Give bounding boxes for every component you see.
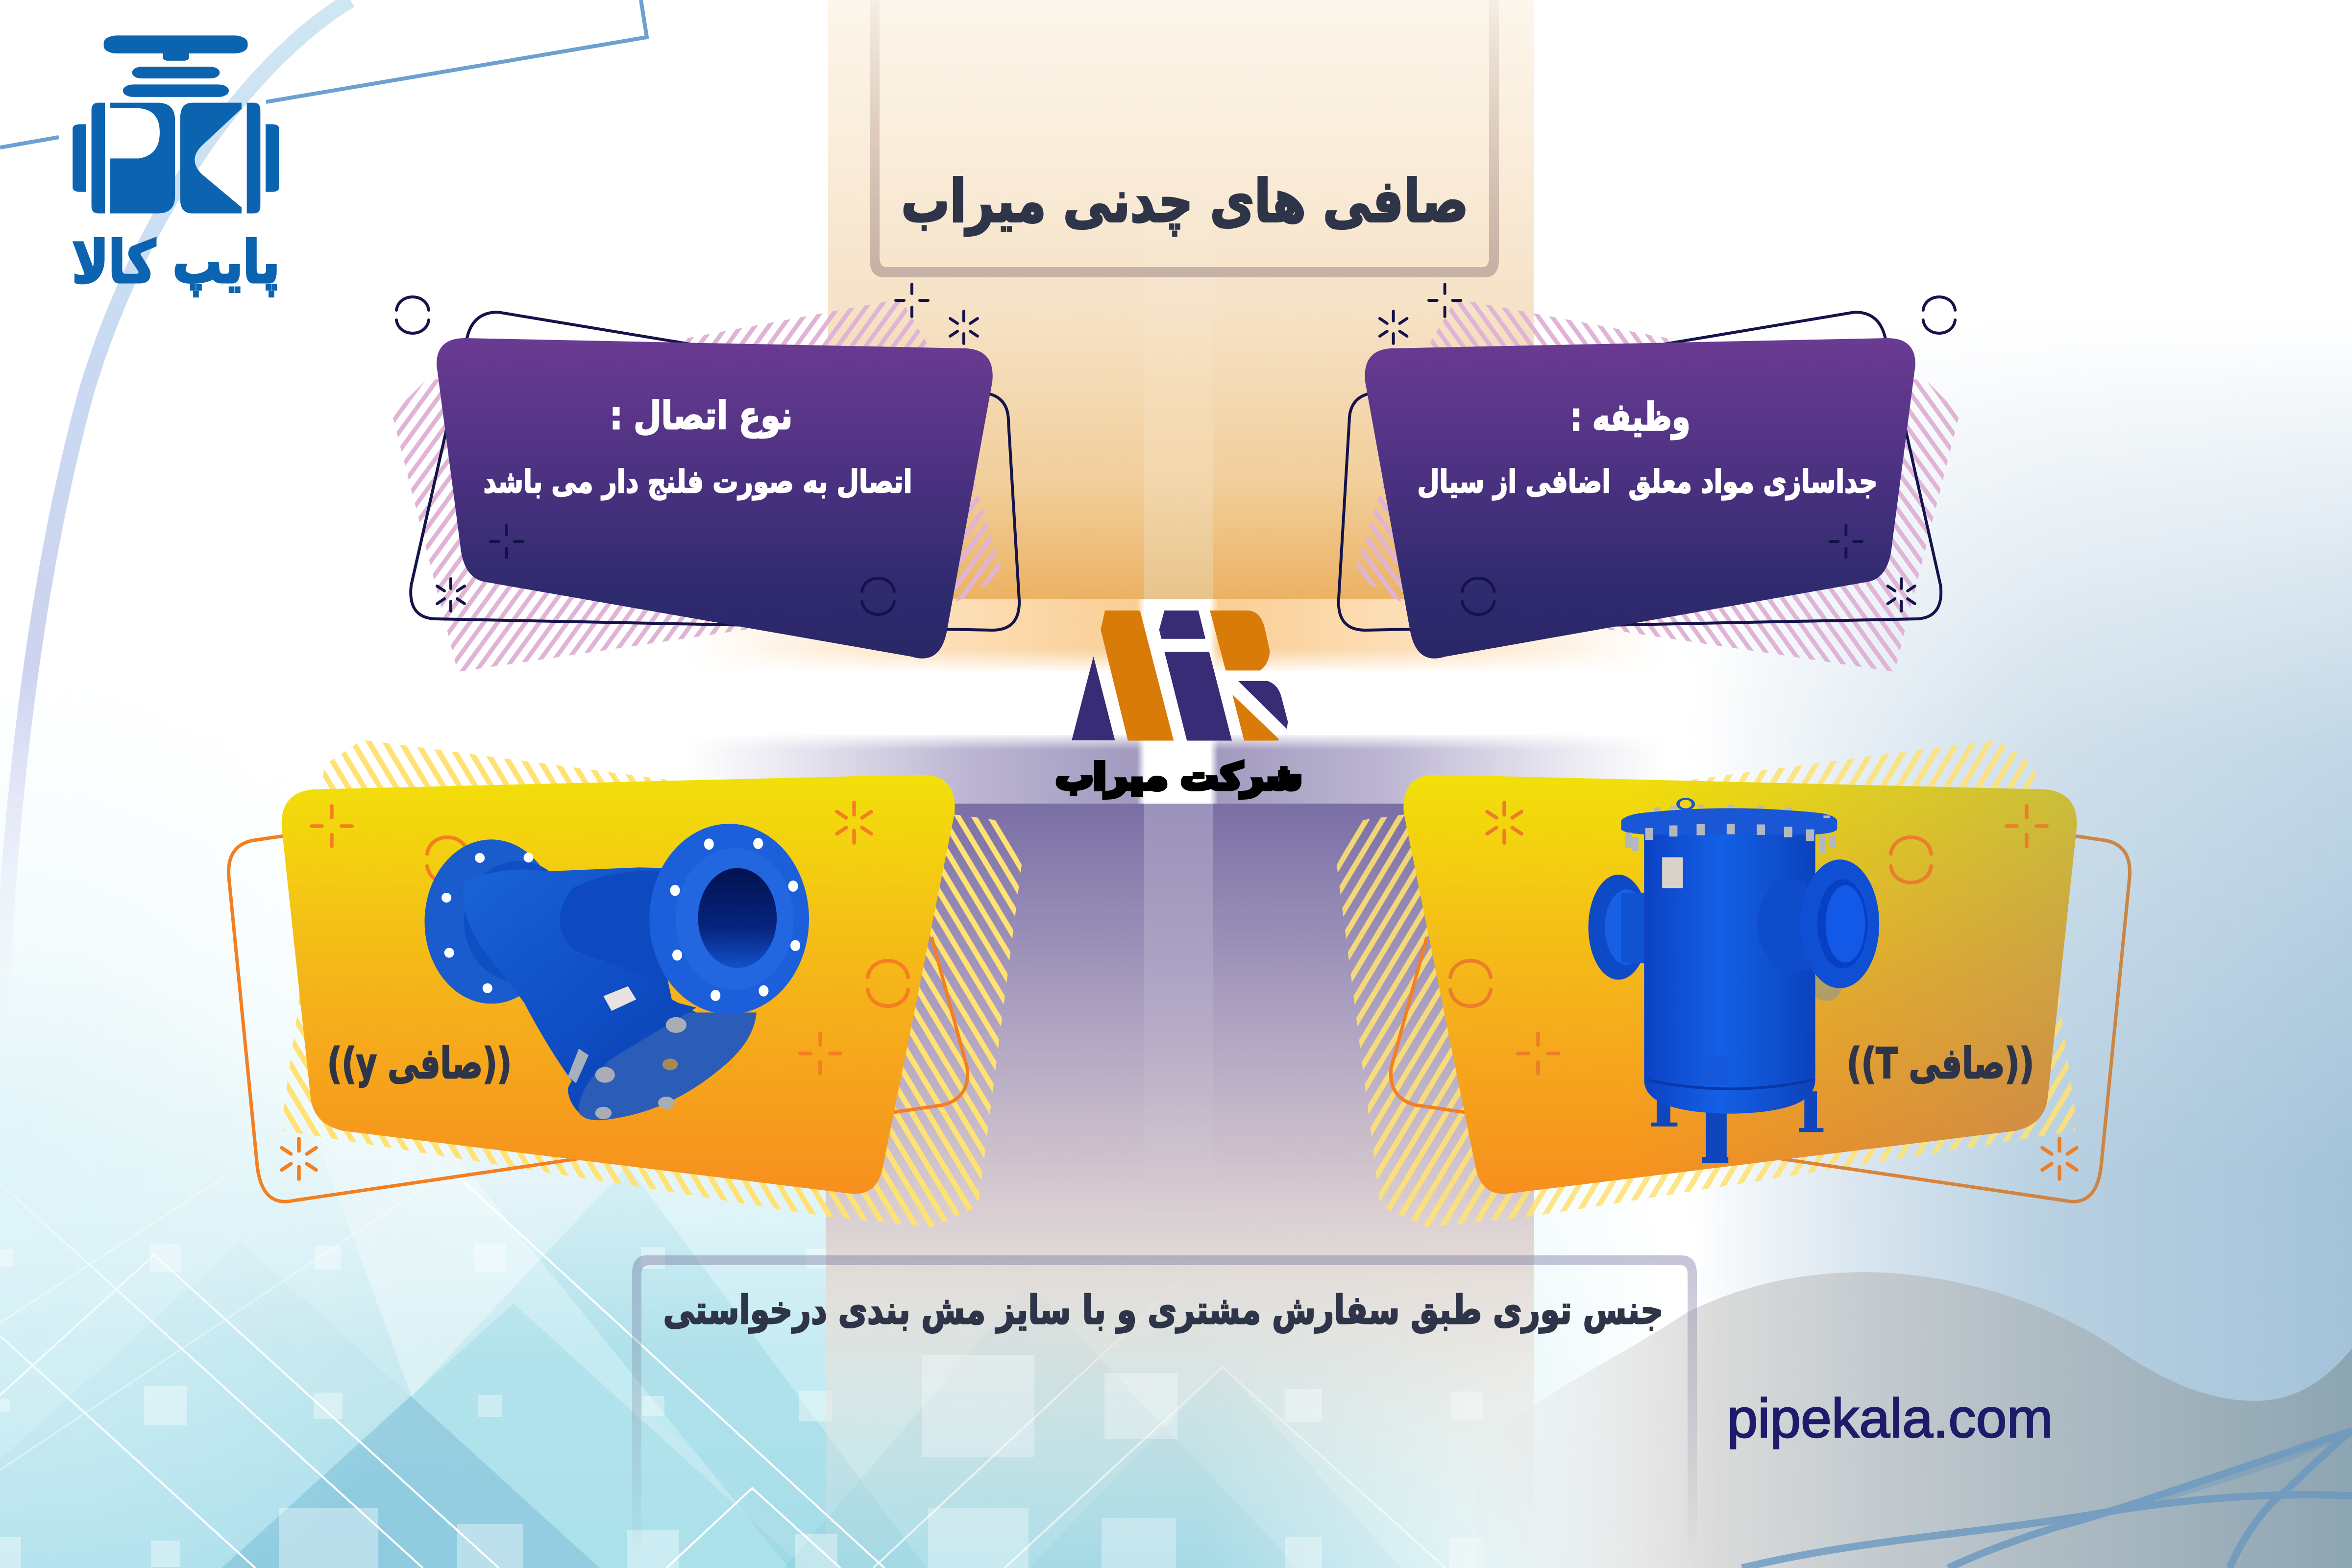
hatch [392, 299, 1004, 672]
outline [1391, 833, 2130, 1201]
text: function: جداسازی مواد معلق اضافی از سیال [1417, 464, 1878, 500]
background squares [0, 1244, 1650, 1568]
mirab mark [1072, 611, 1288, 741]
cyan lower-left wash [0, 931, 1666, 1568]
title: صافی های چدنی میراب [901, 168, 1469, 236]
lower centre lighter strip [1144, 804, 1213, 1245]
product: y strainer [424, 824, 809, 1120]
white fade over blue wash [1666, 318, 2352, 1176]
background triangles [0, 980, 1401, 1568]
logo wordmark: پایپ کالا [72, 228, 280, 296]
icons [1380, 284, 1955, 614]
panel: function [1339, 284, 1960, 672]
icons [396, 284, 978, 614]
leg bracket [1703, 1055, 1728, 1085]
hatch [1337, 740, 2075, 1227]
squares over blue wash [1770, 1534, 2293, 1568]
grey wave [1476, 1272, 2352, 1568]
squares over strip [922, 1355, 1483, 1568]
panel: connection type [392, 284, 1019, 672]
top centre lighter strip [1144, 147, 1213, 599]
outline [411, 312, 1019, 630]
top-left curved arc [0, 0, 350, 1029]
panel: y strainer [229, 740, 1022, 1227]
hatch [1353, 299, 1960, 672]
card [282, 775, 955, 1194]
card [1365, 338, 1915, 659]
heading: function: وظیفه : [1570, 395, 1690, 440]
blue curve lines [1742, 1431, 2352, 1568]
title frame [870, 0, 1499, 277]
heading: connection type: نوع اتصال : [610, 394, 793, 438]
product: t strainer [1588, 799, 1879, 1163]
pale wash left [0, 662, 490, 1568]
left nozzle [1588, 875, 1648, 980]
logo icon [73, 35, 279, 214]
right nozzle [1757, 859, 1879, 988]
purple side band [686, 735, 1666, 818]
card [1403, 775, 2077, 1194]
purple band upper fade [686, 733, 1666, 750]
white fade over wash top [0, 931, 1666, 1348]
nameplate [1662, 857, 1683, 888]
seam [1646, 1080, 1813, 1089]
top centre strip [828, 0, 1534, 599]
logo: mirab [1055, 611, 1302, 798]
white centre band [1137, 599, 1218, 805]
eye bolt [1678, 799, 1693, 809]
lower centre strip [826, 804, 1534, 1568]
orange band lower fade [686, 649, 1666, 674]
bolts [1625, 805, 1836, 853]
hatch [284, 740, 1022, 1227]
vessel [1644, 825, 1815, 1114]
orange side band [686, 588, 1666, 671]
shadow [1811, 972, 1841, 1001]
card [437, 338, 993, 659]
card tint [1403, 775, 2077, 1194]
background white lines [0, 1176, 1446, 1568]
legs [1651, 1055, 1823, 1163]
label: t strainer: ((صافی T)) [1847, 1039, 2034, 1088]
outline [229, 833, 968, 1201]
white fade over wash right [1200, 735, 1666, 1568]
top-left blue polyline [0, 0, 647, 147]
top flange [1621, 808, 1837, 834]
mirab wordmark: شرکت میراب [1055, 756, 1302, 798]
blue right-side wash [1666, 318, 2352, 1568]
panel: t strainer [1337, 740, 2130, 1227]
bottom frame [632, 1255, 1697, 1558]
bottom text: جنس توری طبق سفارش مشتری و با سایز مش بندی درخواستی [663, 1287, 1663, 1333]
text: connection type: اتصال به صورت فلنج دار می باشد [483, 464, 912, 500]
outline [1339, 312, 1941, 630]
label: y strainer: ((صافی y)) [327, 1039, 512, 1088]
icons [282, 803, 908, 1179]
icons [1450, 803, 2077, 1179]
logo: pipe kala [72, 35, 280, 296]
website: pipekala.com [1727, 1388, 2053, 1449]
